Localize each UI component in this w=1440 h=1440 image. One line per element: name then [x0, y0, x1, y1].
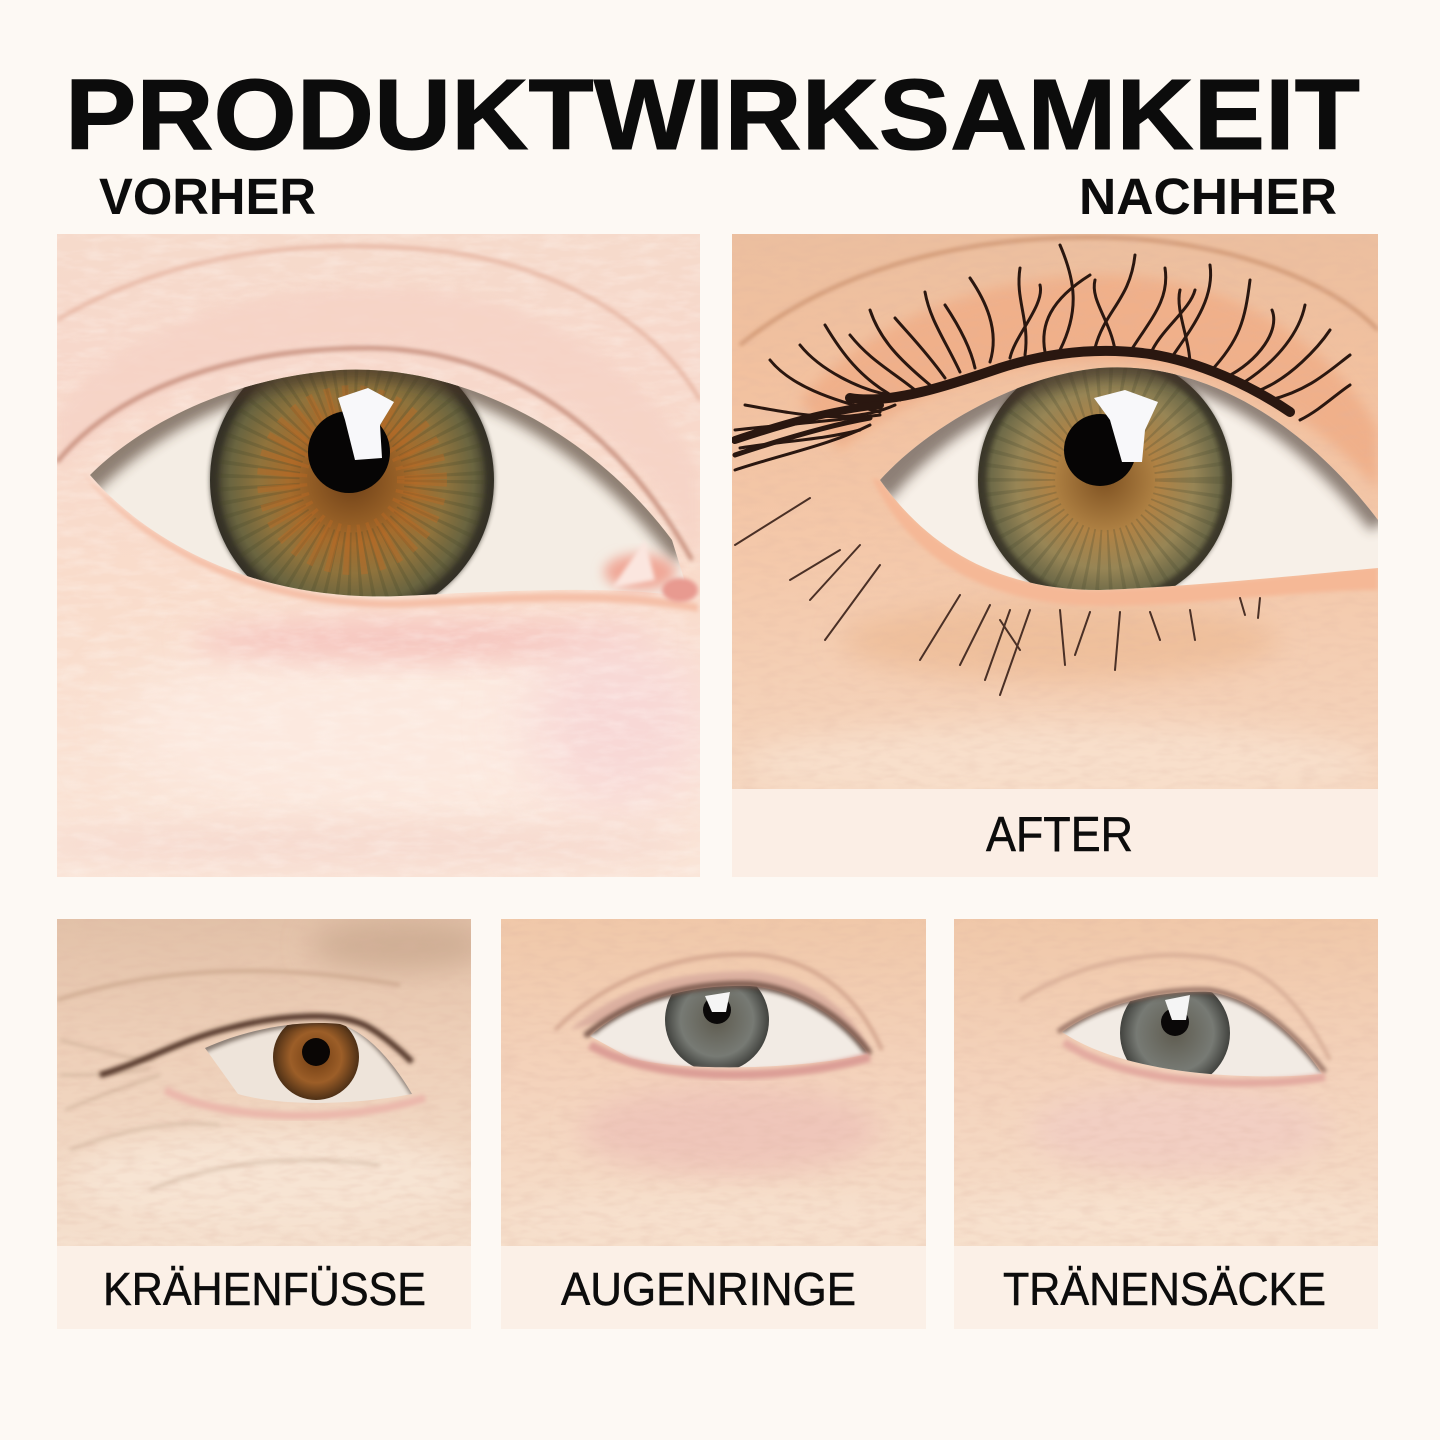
skin texture [732, 234, 1378, 789]
caption: after: AFTER [986, 808, 1133, 862]
caption band: dark circles [501, 1246, 926, 1329]
caption: Augenringe: AUGENRINGE [561, 1263, 856, 1315]
lower lid rim [80, 470, 698, 612]
panel: dark circles photo [500, 919, 960, 1246]
lid shadow [875, 359, 1385, 520]
eye opening [590, 986, 866, 1068]
caption: Tränensäcke: TRÄNENSÄCKE [1003, 1263, 1326, 1315]
iris [210, 370, 494, 596]
tear duct [604, 554, 676, 590]
skin texture [57, 234, 700, 877]
upper lashes [735, 245, 1350, 470]
lid shadow [80, 360, 690, 550]
title: PRODUKTWIRKSAMKEIT [65, 59, 1360, 171]
panel: crow's feet photo [57, 919, 490, 1246]
label: before: VORHER [99, 168, 316, 225]
eye opening [1062, 992, 1322, 1076]
caption: Krähenfüsse: KRÄHENFÜSSE [103, 1263, 426, 1315]
panel: eye bags photo [940, 919, 1400, 1246]
panel: after eye photo [732, 234, 1390, 805]
highlight [338, 388, 394, 460]
wrinkles [60, 1040, 380, 1190]
lower lid rim [872, 478, 1378, 606]
lower lashes [735, 498, 1260, 695]
highlight [1094, 390, 1158, 462]
caption band: eye bags [954, 1246, 1378, 1329]
iris [665, 986, 769, 1068]
skin texture [526, 1182, 908, 1246]
after caption band [732, 789, 1378, 877]
iris [978, 367, 1232, 590]
eye opening [90, 370, 684, 596]
eye opening [880, 367, 1378, 590]
label: after: NACHHER [1079, 168, 1337, 225]
upper lid [63, 293, 698, 530]
skin texture [965, 1188, 1348, 1244]
eye opening [205, 1023, 412, 1103]
iris [1120, 992, 1230, 1074]
panel: before eye photo [30, 234, 720, 877]
skin texture [88, 1120, 471, 1246]
iris [273, 1023, 359, 1100]
lid shading [570, 971, 870, 1050]
caption band: crow's feet [57, 1246, 471, 1329]
